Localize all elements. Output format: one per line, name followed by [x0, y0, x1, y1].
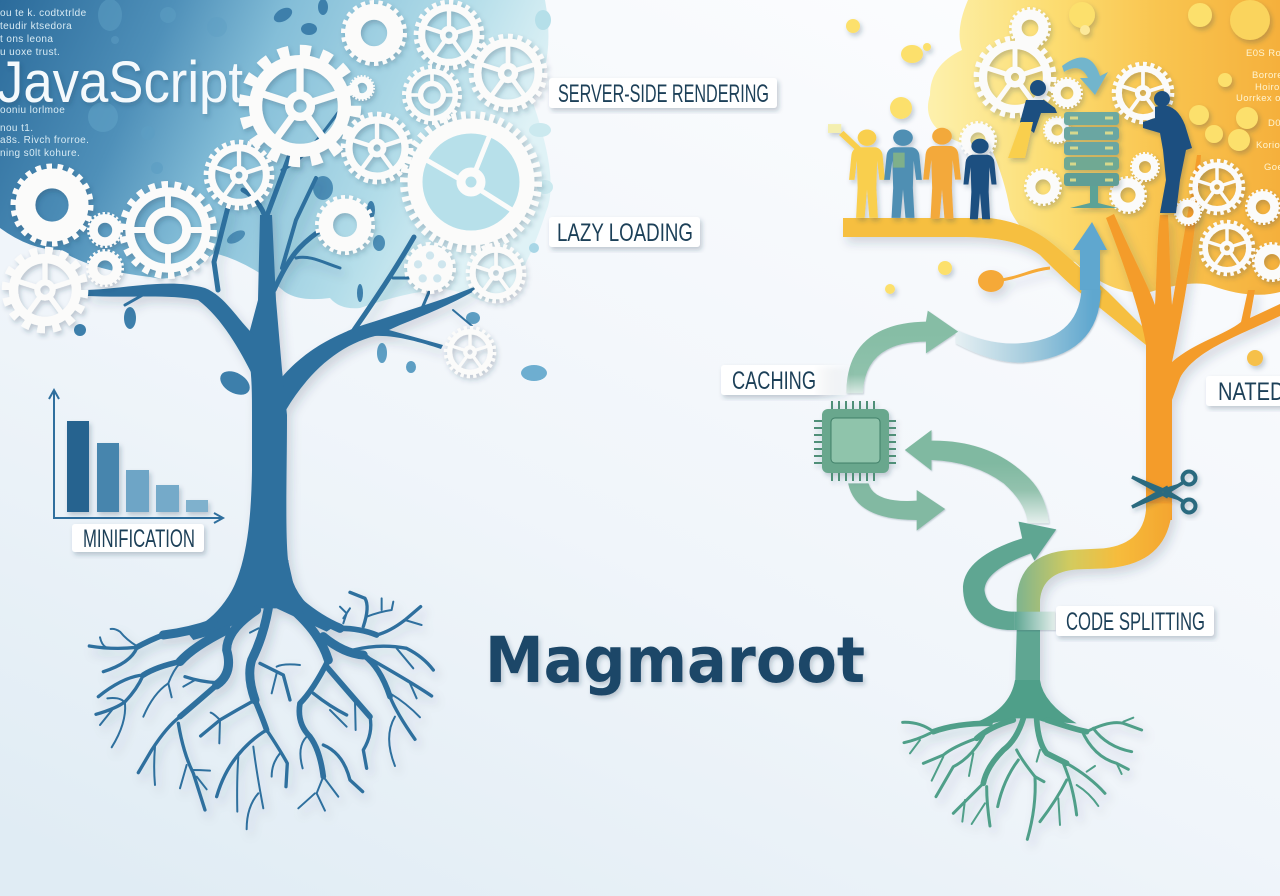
orange tree: [843, 155, 1280, 839]
green arrow: back to chip: [905, 430, 1049, 523]
panel: blue small text: u uoxe trust.: [0, 47, 60, 58]
server stack: [1064, 112, 1119, 208]
orange trunk with forks: [1106, 155, 1280, 520]
label: server-side rendering: [549, 78, 777, 108]
label: code splitting: CODE SPLITTING: [1066, 608, 1205, 636]
green arrow: chip output: [848, 483, 945, 531]
green roots: [903, 680, 1142, 839]
person navy right: [1143, 91, 1192, 213]
yellow gears: [961, 9, 1280, 280]
bars: [67, 421, 208, 512]
icon: scissors: [1132, 472, 1196, 512]
label: code splitting: [1056, 606, 1214, 636]
blue tree branches: [125, 110, 472, 330]
panel: yellow dots: [846, 0, 1270, 366]
rotating arrow around server: [1062, 58, 1108, 95]
panel: orange small text: [1236, 48, 1280, 173]
panel: blue leaves and dots: [74, 0, 553, 400]
label: minification: [72, 524, 204, 553]
blue up arrow: [1073, 222, 1107, 290]
green arrow: caching: [846, 311, 958, 393]
person climbing legs: [1008, 122, 1033, 158]
right limb: [282, 287, 476, 410]
white gears left: [6, 3, 544, 376]
bar chart: [49, 390, 223, 523]
platform branch: [843, 218, 1146, 345]
person yellow: [828, 124, 885, 218]
label: caching: CACHING: [732, 367, 816, 395]
s-curve tail fade: [1015, 612, 1056, 630]
small branch: [995, 268, 1050, 281]
label: server-side rendering: SERVER-SIDE RENDERING: [558, 80, 769, 108]
person orange: [923, 128, 961, 219]
trunk s-curve gradient: [1017, 503, 1172, 630]
label: minification: MINIFICATION: [83, 525, 195, 553]
panel: blue small text: t ons leona: [0, 34, 53, 45]
people on platform: [828, 80, 1192, 219]
label: lazy loading: LAZY LOADING: [557, 219, 693, 247]
panel: blue small text: nou t1.: [0, 123, 33, 134]
blue tree roots: [89, 560, 433, 829]
panel: blue small text: teudir ktsedora: [0, 21, 72, 32]
orange bud: [978, 270, 1004, 292]
panel: blue small text: a8s. Rivch frorroe.: [0, 135, 89, 146]
person blue: [884, 130, 922, 218]
green arrow: s-curve: [963, 522, 1056, 630]
arrows group: [846, 290, 1101, 630]
panel: blue small text: ou te k. codtxtrlde: [0, 8, 87, 19]
title: Magmaroot: [485, 624, 865, 697]
axes: [49, 390, 223, 523]
panel: blue small text: ooniu lorlmoe: [0, 105, 65, 116]
person navy: [963, 139, 997, 219]
blue tree trunk: [227, 215, 297, 600]
green lower trunk: [1015, 620, 1040, 690]
left limb: [87, 284, 254, 378]
panel: orange small text: Korio: [1256, 140, 1280, 151]
blue arrow: [956, 290, 1101, 363]
panel: blue foliage: [0, 0, 551, 308]
blue tree: [87, 110, 476, 829]
large clock gear: [404, 115, 538, 249]
person navy climbing: [1020, 80, 1057, 133]
icon: chip: [814, 401, 896, 481]
panel: blue small text: [0, 8, 89, 159]
panel: blue small text: ning s0lt kohure.: [0, 148, 80, 159]
heading: JavaScript: JavaScript: [0, 50, 243, 115]
panel: yellow foliage: [928, 0, 1280, 295]
panel: orange small text: Hoiro: [1255, 82, 1280, 93]
gear large top: [245, 51, 355, 161]
